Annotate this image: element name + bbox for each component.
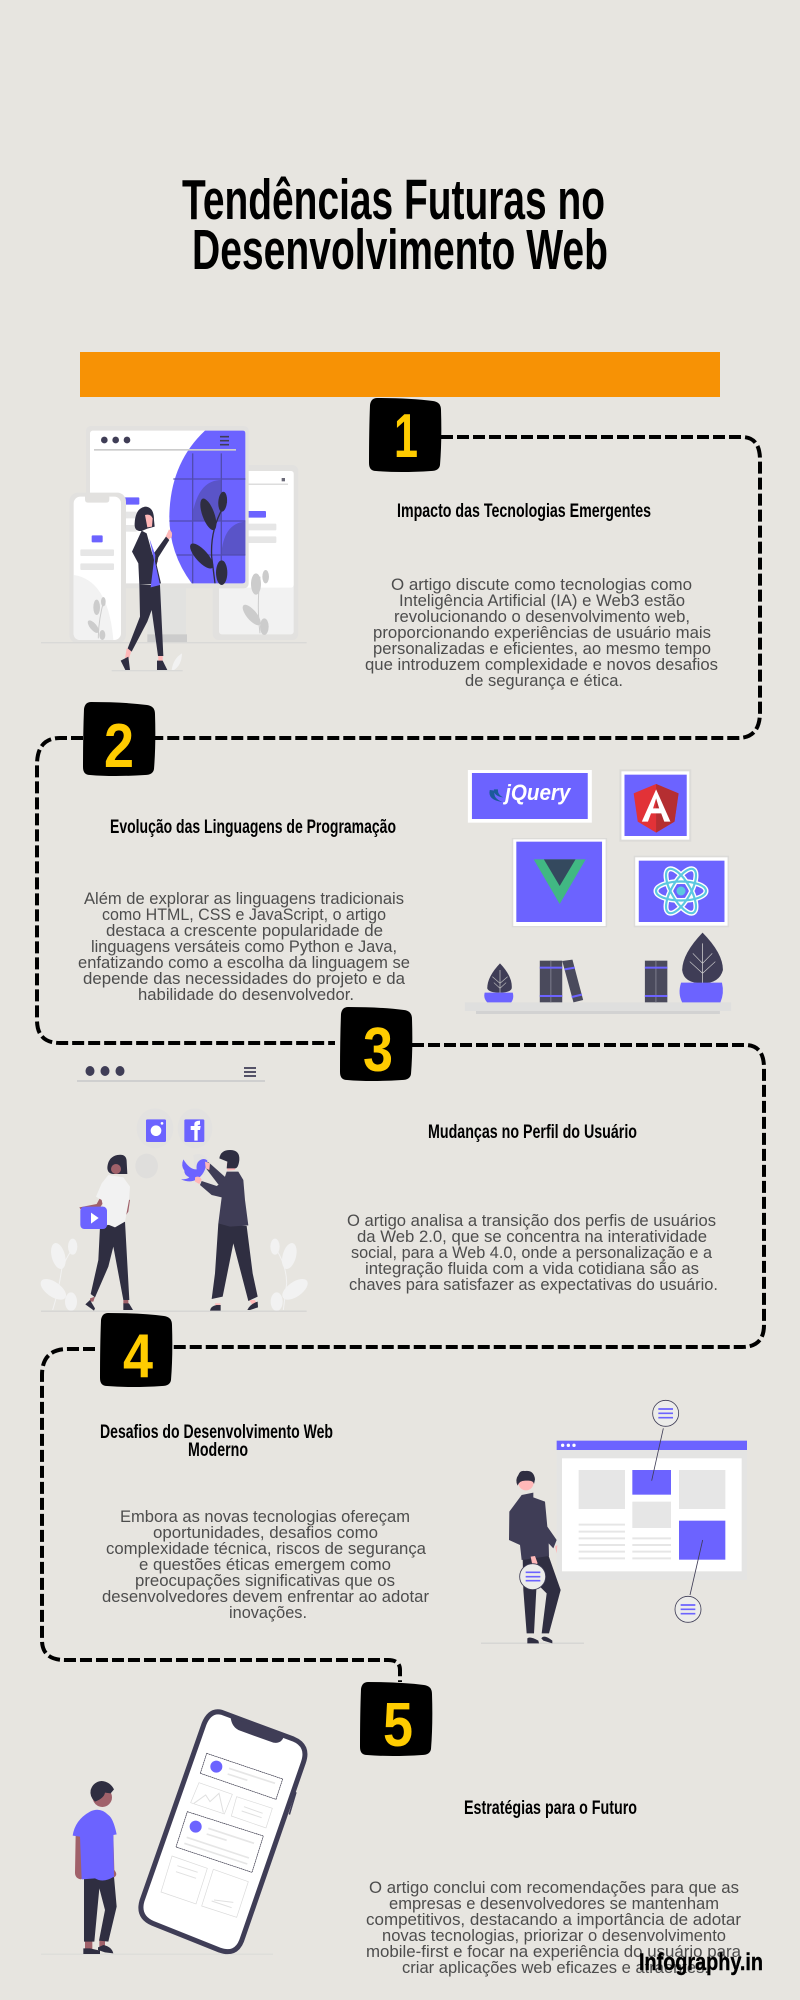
text block: section 1: O artigo discute como tecnologias como [391, 575, 692, 594]
text block: section 4: inovações. [229, 1603, 307, 1622]
number badge 2: 2 [104, 712, 134, 781]
illustration: man beside giant smartphone [41, 1712, 305, 1955]
dashed connector: 1 to 2 [153, 437, 760, 738]
text block: section 4: oportunidades, desafios como [153, 1523, 378, 1542]
text block: section 4: desenvolvedores devem enfrentar ao adotar [102, 1587, 429, 1606]
number badge 3 [340, 1007, 412, 1085]
title: Desenvolvimento Web [192, 218, 608, 282]
text block: section 2: depende das necessidades do projeto e da [83, 969, 406, 988]
number badge 2 [83, 702, 155, 781]
text block: section 2: habilidade do desenvolvedor. [138, 985, 354, 1004]
title [182, 168, 608, 282]
text block: section 5: criar aplicações web eficazes e atraentes. [402, 1958, 709, 1977]
text block: section 3: chaves para satisfazer as expectativas do usuário. [349, 1275, 718, 1294]
text block: section 2: como HTML, CSS e JavaScript, o artigo [102, 905, 386, 924]
text block: section 3 [347, 1211, 718, 1294]
text block: section 5: empresas e desenvolvedores se mantenham [389, 1894, 719, 1913]
text block: section 2 [78, 889, 410, 1004]
title: Tendências Futuras no [182, 168, 605, 232]
text block: section 4: Embora as novas tecnologias ofereçam [120, 1507, 410, 1526]
text block: section 1: personalizadas e eficientes, ao mesmo tempo [373, 639, 711, 658]
illustration: two people with social media icons [37, 1108, 311, 1312]
number badge 1: 1 [394, 402, 418, 471]
text block: section 5: novas tecnologias, priorizar o desenvolvimento [382, 1926, 726, 1945]
text block: section 1: revolucionando o desenvolvimento web, [394, 607, 690, 626]
text block: section 2: linguagens versáteis como Python e Java, [91, 937, 397, 956]
text block: section 5: O artigo conclui com recomendações para que as [369, 1878, 739, 1897]
illustration: woman and web windows [41, 426, 307, 671]
illustration: man beside web page layout [481, 1400, 747, 1644]
text block: section 3: integração fluida com a vida cotidiana são as [365, 1259, 699, 1278]
number badge 5: 5 [383, 1691, 413, 1760]
heading: Mudanças no Perfil do Usuário: Mudanças no Perfil do Usuário [428, 1122, 637, 1143]
heading: Impacto das Tecnologias Emergentes: Impacto das Tecnologias Emergentes [397, 501, 651, 522]
dashed connector: 3 to 4 [172, 1045, 764, 1347]
number badge 5 [360, 1682, 432, 1760]
illustration: framework logos on shelf [465, 769, 731, 1014]
text block: section 3: da Web 2.0, que se concentra na interatividade [357, 1227, 707, 1246]
text block: section 2: enfatizando como a escolha da linguagem se [78, 953, 410, 972]
number badge 4: 4 [123, 1322, 153, 1391]
illustration: browser header bar [77, 1066, 265, 1082]
number badge 4 [100, 1313, 172, 1391]
text block: section 1: que introduzem complexidade e novos desafios [365, 655, 718, 674]
text block: section 5 [366, 1878, 742, 1977]
heading: Evolução das Linguagens de Programação: Evolução das Linguagens de Programação [110, 817, 396, 838]
heading: Desafios do Desenvolvimento Web Moderno: Moderno [188, 1440, 248, 1461]
text block: section 3: social, para a Web 4.0, onde a personalização e a [351, 1243, 713, 1262]
illustration: framework logos on shelf: jQuery [502, 781, 571, 805]
text block: section 5: competitivos, destacando a importância de adotar [366, 1910, 741, 1929]
text block: section 1: de segurança e ética. [465, 671, 623, 690]
number badge 1 [369, 398, 441, 472]
text block: section 2: Além de explorar as linguagens tradicionais [84, 889, 404, 908]
text block: section 1: proporcionando experiências de usuário mais [373, 623, 711, 642]
text block: section 3: O artigo analisa a transição dos perfis de usuários [347, 1211, 716, 1230]
text block: section 4: e questões éticas emergem como [139, 1555, 391, 1574]
text block: section 5: mobile-first e focar na experiência do usuário para [366, 1942, 742, 1961]
text block: section 1: Inteligência Artificial (IA) e Web3 estão [399, 591, 685, 610]
text block: section 4 [102, 1507, 429, 1622]
heading: Desafios do Desenvolvimento Web Moderno [100, 1422, 333, 1461]
text block: section 2: destaca a crescente popularidade de [106, 921, 383, 940]
heading: Estratégias para o Futuro: Estratégias para o Futuro [464, 1798, 637, 1819]
heading: Desafios do Desenvolvimento Web Moderno: Desafios do Desenvolvimento Web [100, 1422, 333, 1443]
text block: section 1 [365, 575, 718, 690]
dashed connector: 2 to 3 [37, 738, 335, 1043]
watermark: Infography.in [639, 1949, 763, 1976]
text block: section 4: complexidade técnica, riscos de segurança [106, 1539, 427, 1558]
dashed connector: 4 to 5 [42, 1349, 400, 1682]
orange banner [80, 352, 720, 397]
number badge 3: 3 [363, 1016, 393, 1085]
text block: section 4: preocupações significativas que os [135, 1571, 395, 1590]
